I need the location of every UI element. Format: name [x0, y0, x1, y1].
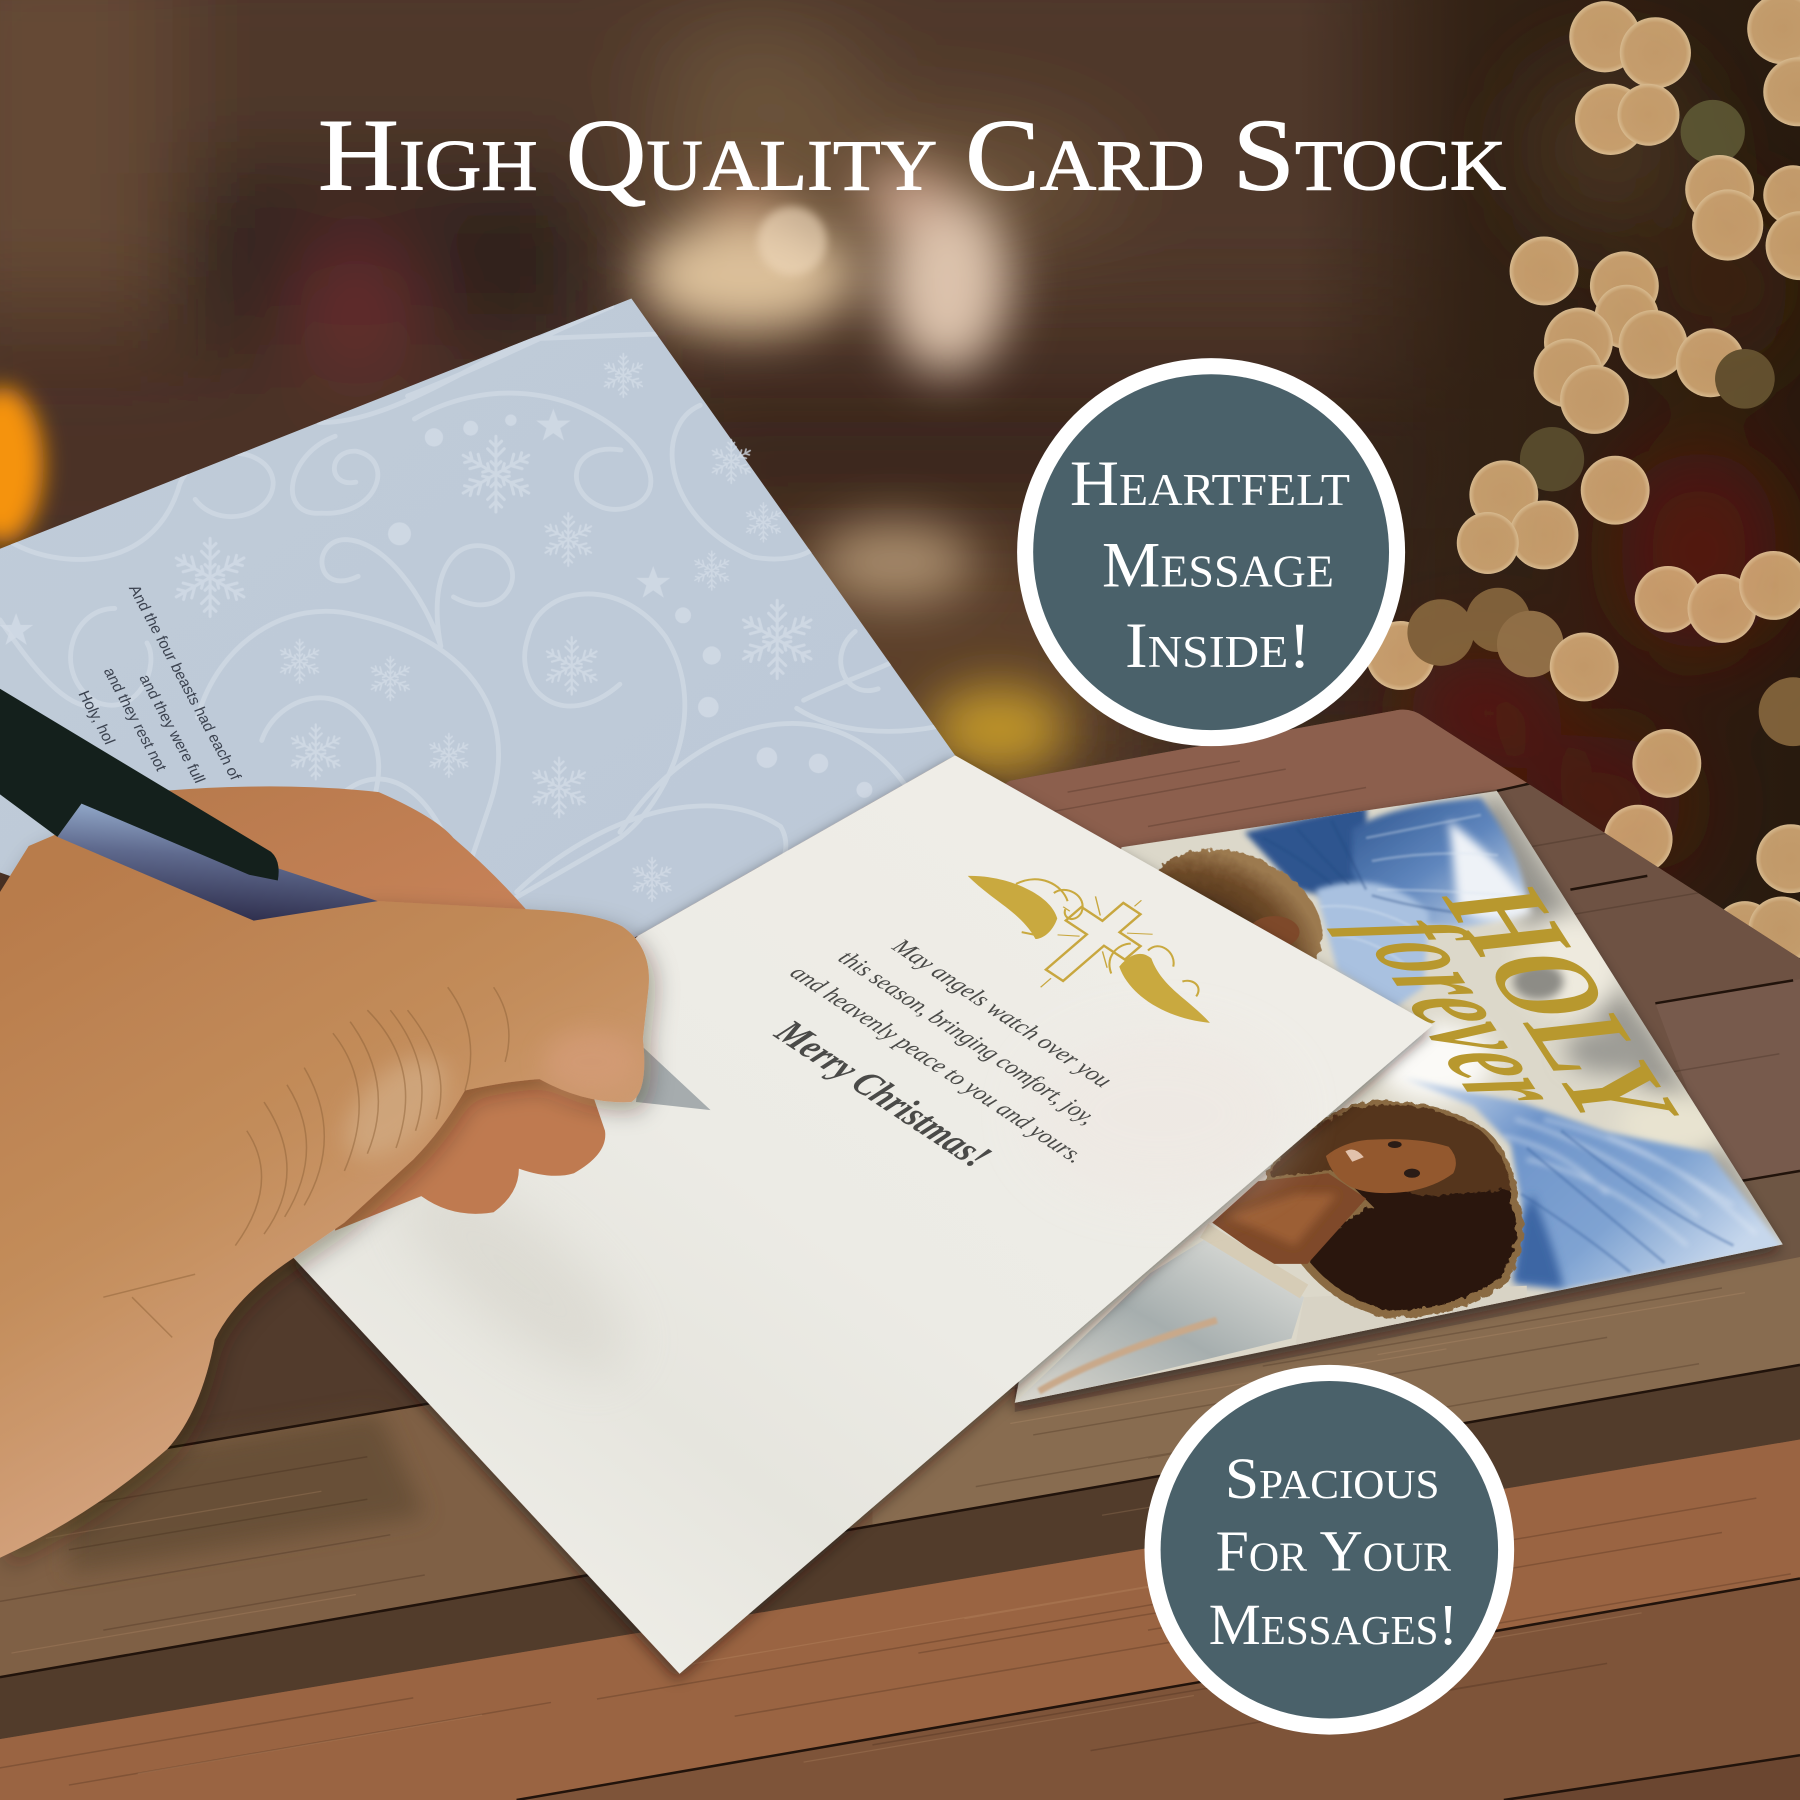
title: High Quality Card Stock: [318, 98, 1506, 212]
plank seams: [0, 783, 1800, 1800]
thumb tip shading: [543, 1030, 639, 1094]
plank AB: [0, 1404, 872, 1676]
message verse: this season, bringing comfort, joy,: [832, 947, 1102, 1129]
upper angel afro: [1125, 824, 1343, 1012]
writing hand with pen: [0, 689, 711, 1558]
lower plank: [517, 1578, 1800, 1800]
verse text on blue panel: and they were full: [135, 672, 208, 786]
upper wing feather streaks: [1320, 815, 1510, 970]
dress lace ruffle: [1204, 1231, 1304, 1291]
badge: heartfelt message inside: Message: [1102, 530, 1334, 601]
pen barrel: [57, 804, 378, 921]
gold cross emblem: [1001, 874, 1183, 1015]
upper wing: [1244, 798, 1533, 1008]
badge: heartfelt message inside: Heartfelt: [1070, 448, 1350, 519]
palm and thumb: [0, 829, 649, 1558]
sky clouds: [1458, 791, 1783, 1244]
badge: spacious for your messages: Spacious: [1225, 1446, 1440, 1511]
badge: spacious for your messages: For Your: [1216, 1518, 1452, 1583]
knuckle highlight: [327, 1039, 465, 1177]
wooden table: [0, 689, 1800, 1800]
right planks: [1530, 785, 1799, 958]
badge: heartfelt message inside: Inside!: [1125, 610, 1311, 681]
lower wing: [1403, 1078, 1784, 1289]
knuckle creases: [103, 987, 509, 1337]
dark band: [0, 1365, 1800, 1739]
message verse: May angels watch over you: [885, 935, 1118, 1092]
merry christmas script: Merry Christmas!: [765, 1013, 1000, 1175]
back plank: [1006, 710, 1528, 849]
pen tip: [636, 1047, 711, 1110]
gold left wing: [968, 876, 1083, 939]
neck and chest: [1212, 1173, 1366, 1264]
lower angel afro: [1271, 1105, 1520, 1314]
verse text on blue panel: Holy, hol: [74, 689, 118, 747]
verse text on blue panel: [74, 583, 244, 786]
verse text on blue panel: and they rest not: [100, 666, 170, 774]
badge: spacious for your messages: [1145, 1365, 1514, 1735]
badge: spacious for your messages: Messages!: [1209, 1592, 1458, 1657]
plank above seam A: [170, 1258, 428, 1446]
orange plank: [0, 1440, 1800, 1800]
verse text on blue panel: And the four beasts had each of: [125, 583, 244, 783]
lower angel face: [1326, 1139, 1456, 1193]
white inner card page: [293, 755, 1433, 1674]
blue inner card panel: [0, 298, 955, 1033]
lower wing feather streaks: [1504, 1119, 1756, 1246]
gold script forever: forever: [1326, 911, 1603, 1110]
snowflakes: [0, 354, 872, 901]
gold title holy: HOLY: [1410, 882, 1712, 1130]
christmas lights glow: [758, 207, 827, 276]
back finger: [149, 786, 526, 953]
blurred christmas tree with bokeh lights: [1297, 0, 1800, 1033]
message verse: and heavenly peace to you and yours.: [784, 962, 1090, 1168]
dark wood grain: [0, 761, 1791, 1785]
swirl pattern: [0, 307, 937, 901]
lower angel dress: [1010, 1240, 1304, 1407]
lower fingers: [333, 1033, 605, 1231]
back greeting card with angel art: [1010, 791, 1784, 1407]
badge: heartfelt message inside: [1017, 358, 1405, 746]
pen grip: [0, 689, 279, 880]
gold right wing: [1109, 944, 1210, 1023]
light wood grain: [11, 1293, 1745, 1774]
